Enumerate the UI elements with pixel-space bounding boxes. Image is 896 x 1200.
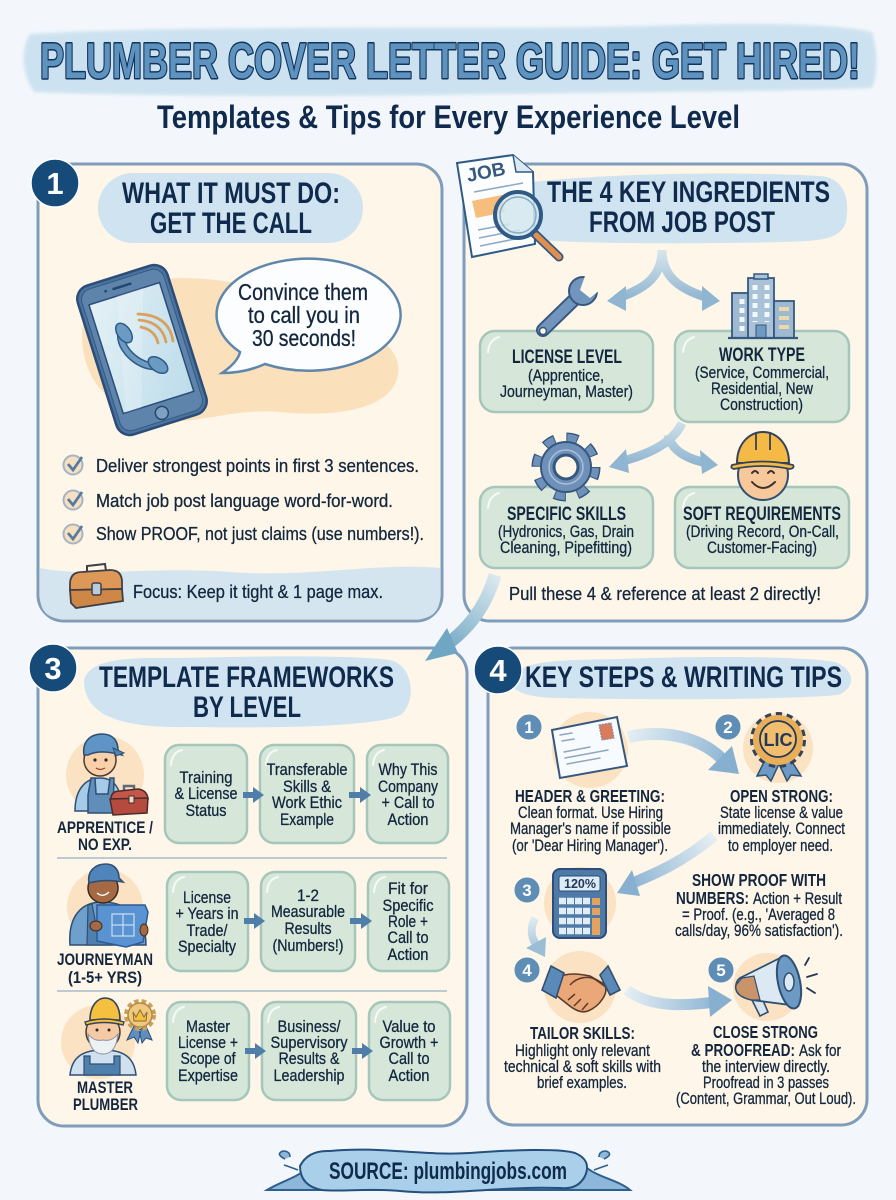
arrow xyxy=(245,1043,266,1059)
step 4 text: technical & soft skills with xyxy=(504,1058,661,1076)
step 1 text: (or 'Dear Hiring Manager'). xyxy=(512,837,668,855)
step 1 text: HEADER & GREETING: xyxy=(515,786,665,806)
icon: job post with magnifier: JOB xyxy=(465,159,507,187)
box: transferable skills: Work Ethic xyxy=(272,793,342,812)
item 2: Match job post language word-for-word. xyxy=(96,490,393,511)
step 1 xyxy=(510,712,671,855)
icon: hard hat smiley xyxy=(731,432,794,500)
arrow: panel 2 to panel 3 xyxy=(425,575,495,661)
step 1 text: Manager's name if possible xyxy=(510,820,671,838)
step 3 text: Action + Result xyxy=(753,890,842,908)
step 3 text: SHOW PROOF WITH xyxy=(692,870,826,890)
box: license years: Specialty xyxy=(178,937,236,956)
box: master license: License + xyxy=(178,1033,238,1052)
card: specific skills: (Hydronics, Gas, Drain xyxy=(498,522,634,541)
source banner xyxy=(267,1150,630,1192)
step 4 xyxy=(504,951,661,1092)
label: master plumber xyxy=(73,1078,138,1114)
box: master license: Scope of xyxy=(180,1049,236,1068)
badge 3: 3 xyxy=(44,651,62,686)
item 1: Deliver strongest points in first 3 sentences. xyxy=(96,455,419,476)
panel 2 note: Pull these 4 & reference at least 2 directly! xyxy=(509,583,821,604)
arrow: step 3 to 4 xyxy=(526,918,546,957)
box: license years: License xyxy=(183,888,231,907)
footer band xyxy=(40,567,440,619)
arrow: step 2 to 3 xyxy=(617,836,714,896)
step 4 text: TAILOR SKILLS: xyxy=(530,1023,635,1043)
label: journeyman xyxy=(57,950,153,987)
item 3: Show PROOF, not just claims (use numbers!). xyxy=(96,523,424,544)
step 1 text xyxy=(510,786,671,855)
box: why this company: + Call to xyxy=(382,793,434,812)
label: master plumber: PLUMBER xyxy=(73,1095,138,1114)
box: why this company: Company xyxy=(378,777,438,796)
box: fit for role: Specific xyxy=(382,896,434,915)
card: work type: WORK TYPE xyxy=(719,345,805,366)
row dividers xyxy=(57,858,447,991)
apprentice row xyxy=(57,734,448,854)
speech bubble xyxy=(217,259,401,373)
box: fit for role: Call to xyxy=(388,928,428,947)
arrow xyxy=(243,787,264,803)
panel 2 heading: FROM JOB POST xyxy=(589,206,775,239)
subtitle: Templates & Tips for Every Experience Level xyxy=(157,99,740,135)
label: apprentice: NO EXP. xyxy=(78,835,132,854)
panel 3 heading xyxy=(84,656,411,727)
step 3 xyxy=(514,867,843,940)
step 2 text xyxy=(718,786,845,855)
step badge 3: 3 xyxy=(522,881,532,900)
icon: license medal: LIC xyxy=(764,730,792,750)
label: apprentice: APPRENTICE / xyxy=(57,818,153,837)
arrow xyxy=(350,913,372,929)
box: training: Training xyxy=(180,768,232,787)
panel 4 heading xyxy=(511,657,851,699)
speech bubble: 30 seconds! xyxy=(252,325,356,351)
step badge 1 xyxy=(516,714,542,740)
box: license years xyxy=(167,872,248,971)
box: transferable skills: Skills & xyxy=(283,777,332,796)
box: value to growth xyxy=(369,1002,450,1100)
icon: license medal xyxy=(753,715,803,781)
box: transferable skills xyxy=(260,745,354,843)
title banner xyxy=(24,24,876,96)
step 5 text: Ask for xyxy=(799,1042,841,1060)
panel 1: what it must do xyxy=(31,159,442,621)
box: license years: Trade/ xyxy=(186,921,228,940)
step 3 text: calls/day, 96% satisfaction'). xyxy=(675,922,843,940)
panel 3: template frameworks xyxy=(29,644,467,1126)
card: soft requirements xyxy=(675,487,849,568)
arrows: post to top ingredients xyxy=(607,250,720,311)
box: why this company xyxy=(367,745,448,843)
badge 4: 4 xyxy=(489,653,507,688)
box: training: & License xyxy=(174,784,238,803)
step 5 text: & PROOFREAD: xyxy=(691,1040,795,1060)
step 2 text: to employer need. xyxy=(728,837,833,855)
card: soft requirements: Customer-Facing) xyxy=(707,538,817,557)
box: business results: Results & xyxy=(278,1049,340,1068)
focus note: Focus: Keep it tight & 1 page max. xyxy=(133,581,383,602)
arrow xyxy=(244,913,265,929)
box: why this company: Action xyxy=(388,810,428,829)
step 3 text: = Proof. (e.g., 'Averaged 8 xyxy=(682,906,835,924)
box: fit for role: Fit for xyxy=(388,879,428,898)
card: specific skills: SPECIFIC SKILLS xyxy=(507,504,626,525)
arrow xyxy=(349,787,371,803)
box: master license xyxy=(167,1002,249,1100)
step badge 5: 5 xyxy=(716,961,726,980)
speech bubble: to call you in xyxy=(248,302,360,328)
panel 1 heading xyxy=(98,173,363,243)
box: business results xyxy=(262,1002,356,1100)
box: value to growth: Growth + xyxy=(380,1033,439,1052)
panel 4: key steps xyxy=(474,646,867,1125)
panel 1 heading: WHAT IT MUST DO: xyxy=(122,177,340,210)
step 5 text: the interview directly. xyxy=(702,1058,830,1076)
step badge 2: 2 xyxy=(723,718,733,737)
icon: job post with magnifier xyxy=(457,155,559,257)
step 2 xyxy=(715,713,845,855)
box: license years: + Years in xyxy=(176,904,238,923)
panel 3 heading: TEMPLATE FRAMEWORKS xyxy=(99,661,394,694)
step 5 xyxy=(676,953,856,1108)
step 4 text xyxy=(504,1023,661,1092)
card: license level: (Apprentice, xyxy=(528,366,604,385)
icon: toolbox xyxy=(70,564,123,608)
panel 3 heading: BY LEVEL xyxy=(193,691,301,724)
panel 2 heading xyxy=(533,174,847,243)
label: apprentice xyxy=(57,818,153,854)
icon: wrench xyxy=(540,272,603,334)
box: master license: Expertise xyxy=(178,1066,238,1085)
step badge 1: 1 xyxy=(524,718,534,737)
step 4 text: Highlight only relevant xyxy=(515,1042,650,1060)
step 2 text: State license & value xyxy=(720,804,843,822)
icon: buildings xyxy=(728,274,798,338)
step 5 text: CLOSE STRONG xyxy=(713,1022,818,1042)
icon: journeyman xyxy=(67,864,148,947)
icon: calculator xyxy=(553,869,606,938)
box: training xyxy=(165,745,247,843)
step 2 text: immediately. Connect xyxy=(718,820,845,838)
label: journeyman: JOURNEYMAN xyxy=(57,950,153,969)
panel 1 heading: GET THE CALL xyxy=(150,207,312,240)
label: master plumber: MASTER xyxy=(77,1078,133,1097)
card: specific skills xyxy=(480,487,653,568)
box: fit for role: Role + xyxy=(388,912,428,931)
box: measurable results xyxy=(261,872,355,971)
label: journeyman: (1-5+ YRS) xyxy=(68,968,142,987)
card: work type: Residential, New xyxy=(711,379,814,398)
arrow: step 1 to 2 xyxy=(628,734,739,774)
box: measurable results: Results xyxy=(284,919,332,938)
box: master license: Master xyxy=(186,1017,230,1036)
card: soft requirements: SOFT REQUIREMENTS xyxy=(683,504,841,525)
icon: gear xyxy=(537,438,595,496)
box: value to growth: Value to xyxy=(382,1017,436,1036)
source text: SOURCE: plumbingjobs.com xyxy=(329,1158,567,1185)
box: training: Status xyxy=(186,801,226,820)
step 2 text: OPEN STRONG: xyxy=(730,786,833,806)
icon: master plumber xyxy=(61,998,154,1079)
card: work type xyxy=(675,331,849,422)
box: fit for role: Action xyxy=(388,945,428,964)
icon: envelope xyxy=(552,717,627,778)
master row xyxy=(61,998,450,1114)
step 5 text xyxy=(676,1022,856,1108)
box: transferable skills: Transferable xyxy=(266,760,348,779)
card: specific skills: Cleaning, Pipefitting) xyxy=(500,538,632,557)
panel 2: 4 key ingredients xyxy=(457,155,867,621)
card: license level xyxy=(480,331,653,412)
icon: calculator: 120% xyxy=(564,877,596,891)
step badge 4 xyxy=(514,957,540,983)
box: measurable results: (Numbers!) xyxy=(272,936,344,955)
peach blob xyxy=(82,278,398,421)
badge 4 xyxy=(474,646,522,694)
icon: apprentice xyxy=(66,734,148,815)
card: work type: (Service, Commercial, xyxy=(695,363,829,382)
badge 1 xyxy=(31,159,79,207)
icon: phone xyxy=(74,261,210,439)
icon: megaphone xyxy=(736,953,817,1016)
arrow: step 4 to 5 xyxy=(627,986,732,1017)
badge 1: 1 xyxy=(46,166,64,201)
card: license level: LICENSE LEVEL xyxy=(512,347,622,368)
arrows: to lower ingredients xyxy=(609,423,718,474)
box: value to growth: Action xyxy=(388,1066,430,1085)
step badge 3 xyxy=(514,877,540,903)
icon: handshake xyxy=(542,966,620,1012)
step 3 text xyxy=(675,870,843,940)
card: license level: Journeyman, Master) xyxy=(500,382,633,401)
step 1 text: Clean format. Use Hiring xyxy=(518,804,663,822)
journeyman row xyxy=(57,864,449,987)
icon: handset xyxy=(121,335,163,366)
box: business results: Business/ xyxy=(278,1017,341,1036)
card: soft requirements: (Driving Record, On-Call, xyxy=(686,522,839,541)
card: work type: Construction) xyxy=(720,395,803,414)
box: why this company: Why This xyxy=(378,760,438,779)
speech bubble: Convince them xyxy=(238,279,368,305)
box: transferable skills: Example xyxy=(280,810,334,829)
step 4 text: brief examples. xyxy=(537,1074,627,1092)
box: value to growth: Call to xyxy=(388,1049,430,1068)
step 3 text: NUMBERS: xyxy=(676,888,749,908)
step 5 text: Proofread in 3 passes xyxy=(703,1074,829,1092)
box: measurable results: 1-2 xyxy=(297,886,319,905)
step badge 5 xyxy=(708,957,734,983)
badge 3 xyxy=(29,644,77,692)
box: business results: Leadership xyxy=(274,1066,344,1085)
box: business results: Supervisory xyxy=(270,1033,348,1052)
step badge 2 xyxy=(715,714,741,740)
step badge 4: 4 xyxy=(522,961,532,980)
box: measurable results: Measurable xyxy=(271,902,345,921)
arrow xyxy=(352,1043,373,1059)
box: fit for role xyxy=(368,872,449,971)
checklist xyxy=(64,455,424,544)
